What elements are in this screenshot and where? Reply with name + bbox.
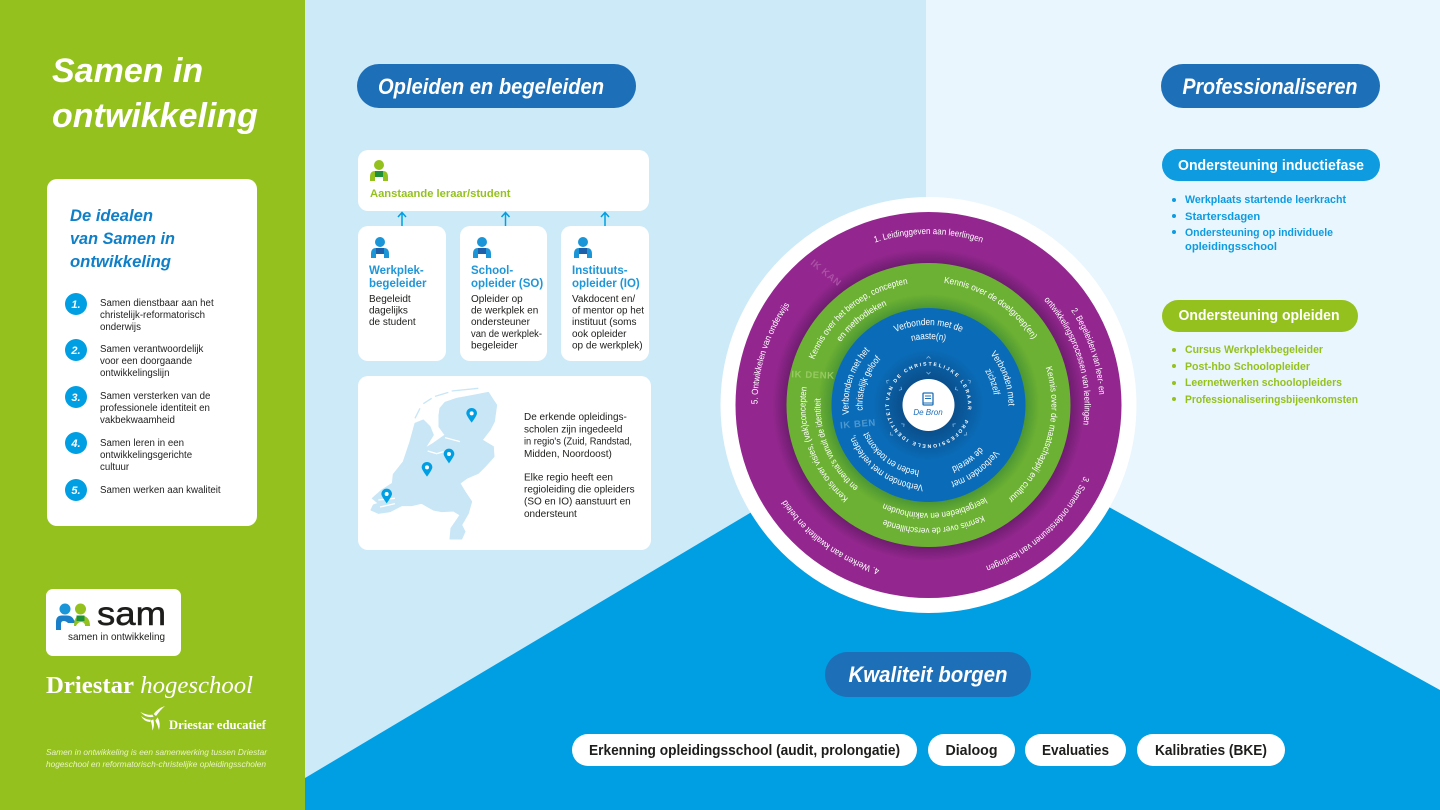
list item 4: cultuur [100,462,130,473]
ring: ik ben (blue): Verbonden met [951,452,1000,488]
card: werkplekbegeleider: Begeleidt [369,294,411,305]
text: regions: Midden, Noordoost) [524,449,612,460]
ring: ik ben (blue): Verbonden met het [842,347,870,415]
ring: ik denk (green): en thema's vanuit de identiteit [814,398,858,490]
pill: Ondersteuning opleiden [1162,300,1358,332]
card: schoolopleider: School- [471,265,513,277]
pill: erkenning: Erkenning opleidingsschool (audit, prolongatie) [589,742,900,759]
card: werkplekbegeleider: Werkplek- [369,265,424,277]
card: aanstaande leraar [358,150,649,211]
text: regions: (SO en IO) aanstuurt en [524,496,631,508]
panel: ideals card [47,179,257,526]
list: inductiefase: Werkplaats startende leerkracht [1185,194,1346,206]
list: inductiefase: Startersdagen [1185,211,1260,223]
pill: kalibraties: Kalibraties (BKE) [1155,742,1267,759]
ring: ik denk (green) [786,263,1070,547]
title [52,52,258,135]
card: schoolopleider: de werkplek en [471,306,538,316]
list item 2: voor een doorgaande [100,356,192,367]
card: instituutsopleider [561,226,649,361]
ring: ik kan (purple): 4. Werken aan kwaliteit en beleid [780,500,880,574]
list item 2 [65,339,204,379]
card: schoolopleider: ondersteuner [471,317,531,328]
list item 3: vakbekwaamheid [100,415,175,426]
text: regions: regioleiding die opleiders [524,484,635,496]
list: opleiden: Cursus Werkplekbegeleider [1185,344,1324,356]
ring: ik denk (green): Kennis over de verschillende [883,516,985,534]
card: instituutsopleider: Instituuts- [572,265,628,277]
list: opleiden: Post-hbo Schoolopleider [1185,361,1311,373]
list item 3: Samen versterken van de [100,391,210,402]
card: instituutsopleider: opleider (IO) [572,278,640,290]
center: De Bron: De Bron [913,408,943,417]
card: aanstaande leraar: Aanstaande leraar/student [370,188,511,200]
logo: sam: samen in ontwikkeling [68,632,165,643]
title: ontwikkeling [52,97,258,135]
list item 4: Samen leren in een [100,438,184,449]
list item 3 [65,386,210,426]
pill: evaluaties [1025,734,1126,766]
pill: Ondersteuning inductiefase: Ondersteuning inductiefase [1178,158,1364,174]
list item 3: 3. [71,392,81,404]
card: schoolopleider: van de werkplek- [471,329,542,340]
text: regions: Elke regio heeft een [524,472,613,484]
background: lighter right area [926,0,1440,810]
logo: Driestar educatief: Driestar educatief [169,718,267,732]
ring: ik ben (blue): de wereld [952,448,983,474]
heading: ideals: ontwikkeling [70,252,172,271]
heading pill: Opleiden en begeleiden: Opleiden en begeleiden [378,74,604,99]
heading pill: Opleiden en begeleiden [357,64,636,108]
background: blue quality area [305,407,1440,810]
center: De Bron [902,379,954,431]
map: Netherlands [371,388,497,539]
text: regions [524,412,635,520]
ring: ik denk (green): Kennis over het beroep, concepten [808,279,908,359]
ring: ik denk (green): Kennis over visies, (vak)concepten [800,387,848,502]
card: regions map [358,376,651,550]
ring: ik kan (purple): 1. Leidinggeven aan leerlingen [874,228,983,242]
list item 1: Samen dienstbaar aan het [100,298,214,309]
card: schoolopleider: begeleider [471,340,518,352]
card: werkplekbegeleider: de student [369,317,416,328]
list item 2: Samen verantwoordelijk [100,344,204,355]
heading pill: Professionaliseren: Professionaliseren [1182,74,1358,99]
ring: ik ben (blue): IK BEN [840,417,876,432]
ring: ik denk (green): Kennis over de doelgroep(en) [944,276,1037,339]
card: werkplekbegeleider: begeleider [369,278,427,290]
heading pill: Kwaliteit borgen [825,652,1031,697]
text: regions: De erkende opleidings- [524,412,627,423]
ring: ik ben (blue) [832,308,1026,502]
ring: ik denk (green): Kennis over de maatschappij en cultuur [1009,366,1058,502]
footer note: hogeschool en reformatorisch-christelijke opleidingsscholen [46,759,266,769]
logo: Driestar hogeschool: Driestar hogeschool [46,673,253,699]
ring: ik kan (purple): 3. Samen ondersteunen van leerlingen [986,476,1090,570]
ring: ik ben (blue): christelijk geloof [856,354,880,410]
arrow 3 [601,212,609,226]
ring: ik ben (blue): zichzelf [985,368,1000,394]
list item 1: onderwijs [100,322,141,333]
background: light blue area [305,0,927,810]
arrow 2 [502,212,510,226]
card: instituutsopleider: Vakdocent en/ [572,294,635,305]
card: schoolopleider: Opleider op [471,294,523,305]
inner ring text [886,356,972,448]
text: regions: ondersteunt [524,509,577,520]
card: instituutsopleider: op de werkplek) [572,340,643,352]
list item 3: professionele identiteit en [100,403,210,414]
ring: ik denk (green): en methodieken [838,301,886,342]
pill: dialoog [928,734,1015,766]
list item 4: ontwikkelingsgerichte [100,450,192,461]
ring: ik kan (purple): 2. Begeleiden van leer- en [1071,308,1104,394]
arrow 1 [398,212,406,226]
list item 5: Samen werken aan kwaliteit [100,485,221,496]
text: regions: in regio's (Zuid, Randstad, [524,436,632,448]
ring: ik kan (purple) [736,212,1122,598]
heading: ideals: De idealen [70,206,153,225]
inner ring text: VAN DE CHRISTELIJKE LERAAR [886,362,972,410]
logo: Driestar educatief [140,706,267,732]
inner ring text: PROFESSIONELE IDENTITEIT [886,404,968,448]
list item 4: 4. [70,438,81,450]
ring: ik denk (green): leergebieden en vakinhouden [882,498,988,519]
ring: ik ben (blue): heden en toekomst [863,432,919,477]
footer note: Samen in ontwikkeling is een samenwerking tussen Driestar [46,747,268,757]
list: inductiefase: opleidingsschool [1185,241,1277,253]
card: instituutsopleider: ook opleider [572,329,627,340]
ring: ik denk (green): IK DENK [791,369,835,382]
ring: ik ben (blue): Verbonden met verleden, [851,435,923,492]
ring: ik ben (blue): Verbonden met de [893,318,962,332]
circle diagram [720,197,1136,613]
list item 2: ontwikkelingslijn [100,368,169,379]
list item 1: 1. [71,299,81,311]
pill: Ondersteuning opleiden: Ondersteuning opleiden [1178,308,1340,324]
text: regions: scholen zijn ingedeeld [524,424,622,436]
pill: kalibraties [1137,734,1285,766]
heading: ideals: van Samen in [70,229,175,248]
pill: dialoog: Dialoog [946,742,998,759]
ring: ik kan (purple): ontwikkelingsprocessen van leerlingen [1044,298,1092,425]
card: werkplekbegeleider [358,226,446,361]
logo: sam: sam [97,595,166,632]
card: werkplekbegeleider: dagelijks [369,306,408,316]
list item 5: 5. [71,485,81,497]
list item 1: christelijk-reformatorisch [100,310,205,321]
card: instituutsopleider: instituut (soms [572,317,636,328]
list: opleiden [1172,344,1358,406]
heading: ideals [70,206,175,271]
footer note [46,747,268,769]
panel: green sidebar [0,0,305,810]
list: opleiden: Professionaliseringsbijeenkomsten [1185,394,1358,406]
list item 4 [65,432,192,473]
card: schoolopleider: opleider (SO) [471,278,543,290]
heading pill: Professionaliseren [1161,64,1380,108]
heading pill: Kwaliteit borgen: Kwaliteit borgen [848,662,1008,687]
card: schoolopleider [460,226,547,361]
list: inductiefase [1172,194,1346,253]
ring: ik ben (blue): Verbonden met [992,350,1015,406]
pill: erkenning [572,734,917,766]
list item 1 [65,293,214,333]
list: opleiden: Leernetwerken schoolopleiders [1185,377,1342,389]
title: Samen in [52,52,203,90]
pill: evaluaties: Evaluaties [1042,742,1109,759]
list item 2: 2. [70,345,81,357]
pill: Ondersteuning inductiefase [1162,149,1380,181]
ring: ik kan (purple): IK KAN [808,258,843,289]
list item 5 [65,479,221,501]
ring: ik ben (blue): naaste(n) [911,332,946,343]
ring: ik kan (purple): 5. Ontwikkelen van onderwijs [751,303,790,404]
logo: sam [46,589,181,656]
list: inductiefase: Ondersteuning op individuele [1185,227,1333,239]
card: instituutsopleider: of mentor op het [572,306,644,316]
